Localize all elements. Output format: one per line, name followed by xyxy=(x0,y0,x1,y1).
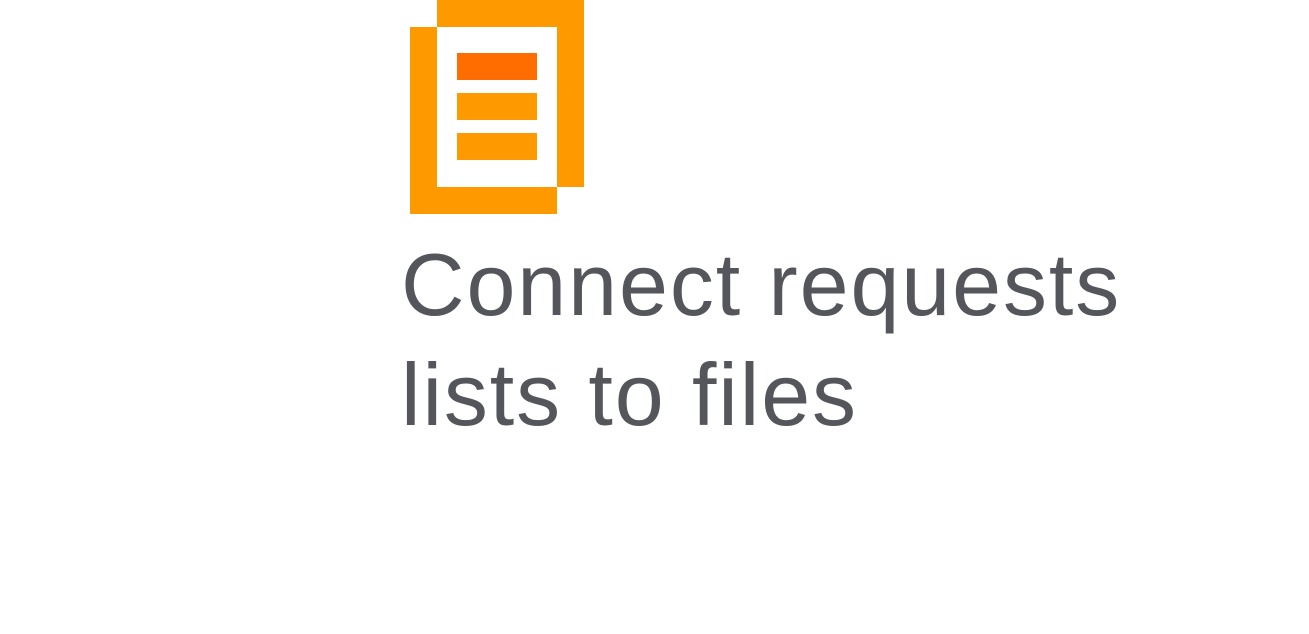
title xyxy=(401,235,1121,444)
title: Connect requests xyxy=(401,235,1121,334)
title: lists to files xyxy=(401,345,858,444)
